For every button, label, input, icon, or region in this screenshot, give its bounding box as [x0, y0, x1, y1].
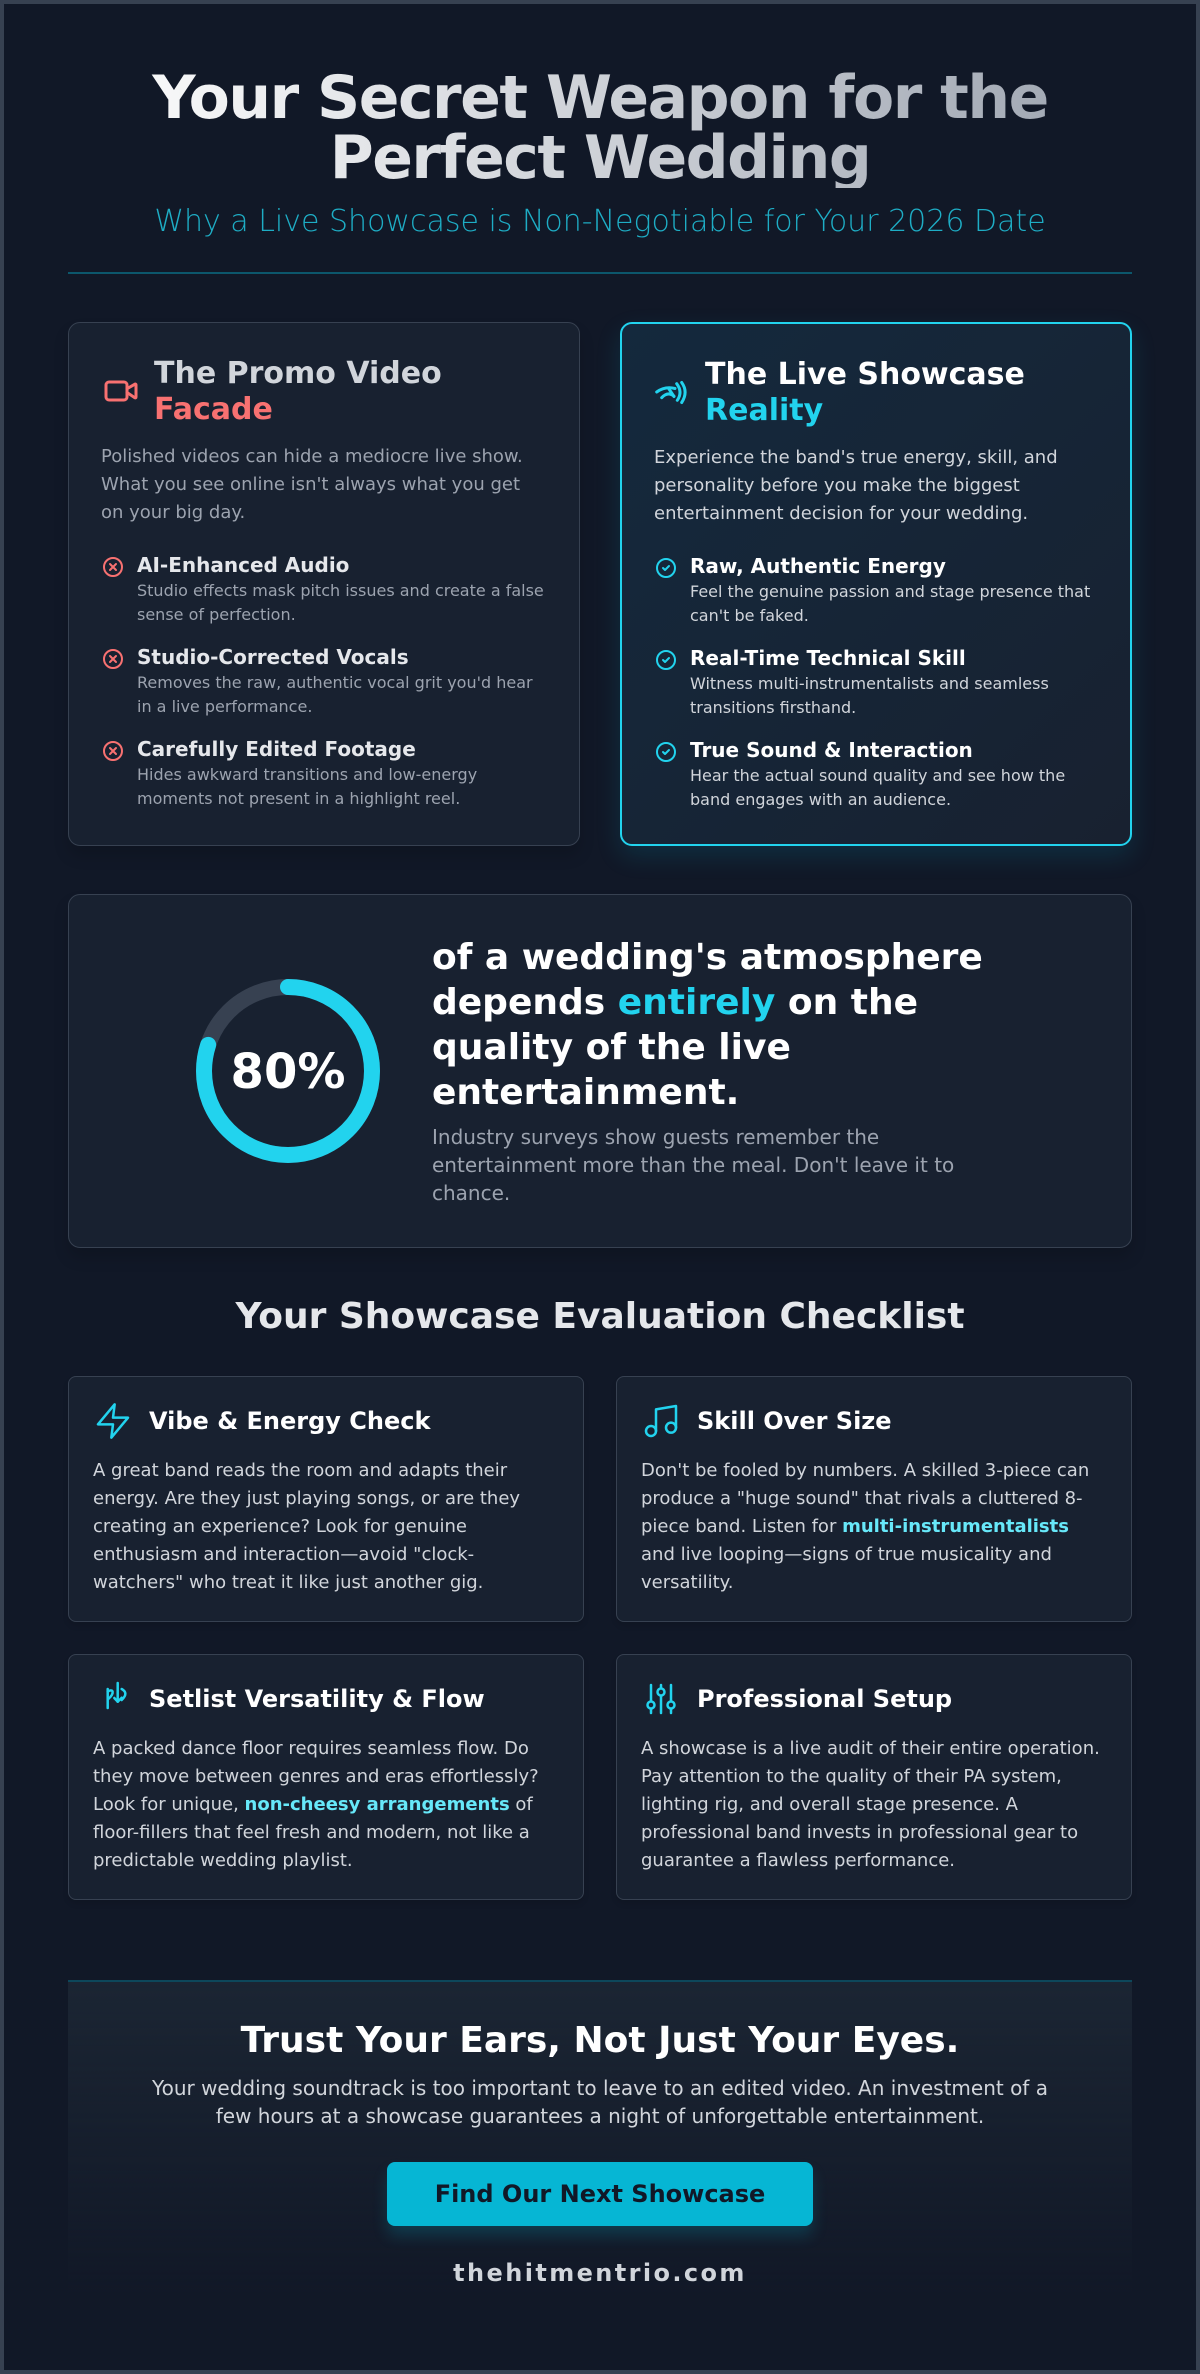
card text: A showcase is a live audit of their entire operation. — [641, 1738, 1100, 1759]
list item: raw authentic energy: Raw, Authentic Energy — [690, 554, 946, 578]
button: Find Our Next Showcase — [435, 2180, 765, 2208]
card text — [641, 1460, 1089, 1593]
panel description: Polished videos can hide a mediocre live show. — [101, 446, 523, 467]
list item: studio-corrected vocals: Studio-Corrected Vocals — [137, 645, 409, 669]
list item: real-time technical skill: Real-Time Technical Skill — [690, 646, 966, 670]
card text: energy. Are they just playing songs, or are they — [93, 1488, 520, 1509]
statistic statement: entertainment. — [432, 1072, 739, 1113]
list item: AI-enhanced audio: Studio effects mask pitch issues and create a false — [137, 581, 544, 600]
card heading: Vibe & Energy Check — [149, 1407, 430, 1435]
icon: x circle 3 — [103, 741, 123, 761]
statistic statement: quality of the live — [432, 1027, 791, 1068]
statistic statement: of a wedding's atmosphere — [432, 937, 983, 978]
icon: video camera — [104, 380, 138, 402]
statistic supporting text: entertainment more than the meal. Don't leave it to — [432, 1153, 954, 1177]
card heading: Skill Over Size — [697, 1407, 892, 1435]
list item: carefully edited footage: Carefully Edited Footage — [137, 737, 416, 761]
list item: raw authentic energy — [690, 554, 1090, 625]
card text: A packed dance floor requires seamless flow. Do — [93, 1738, 529, 1759]
list item: real-time technical skill: transitions firsthand. — [690, 698, 856, 717]
list item: studio-corrected vocals: in a live performance. — [137, 697, 312, 716]
card text: enthusiasm and interaction—avoid "clock- — [93, 1544, 474, 1565]
panel: professional setup — [616, 1654, 1132, 1900]
card text: creating an experience? Look for genuine — [93, 1516, 467, 1537]
list item: studio-corrected vocals: Removes the raw, authentic vocal grit you'd hear — [137, 673, 533, 692]
panel: skill over size — [616, 1376, 1132, 1622]
statistic supporting text: chance. — [432, 1181, 510, 1205]
card heading: Professional Setup — [697, 1685, 952, 1713]
list item: AI-enhanced audio: AI-Enhanced Audio — [137, 553, 349, 577]
list item: carefully edited footage — [137, 737, 477, 808]
panel: the live showcase reality — [620, 322, 1132, 846]
card text: floor-fillers that feel fresh and modern, not like a — [93, 1822, 530, 1843]
call to action section — [68, 1980, 1132, 2294]
panel: setlist versatility and flow — [68, 1654, 584, 1900]
header divider — [68, 272, 1132, 274]
icon: lightning bolt — [96, 1403, 130, 1439]
card text: professional band invests in professional gear to — [641, 1822, 1078, 1843]
card text: and live looping—signs of true musicality and — [641, 1544, 1052, 1565]
card text: watchers" who treat it like just another gig. — [93, 1572, 483, 1593]
panel description: What you see online isn't always what you get — [101, 474, 520, 495]
list item: true sound and interaction: band engages with an audience. — [690, 790, 951, 809]
panel description — [101, 446, 523, 523]
icon: sliders — [646, 1684, 676, 1714]
checklist heading: Your Showcase Evaluation Checklist — [235, 1296, 965, 1337]
panel description: Experience the band's true energy, skill, and — [654, 447, 1058, 468]
call to action text: Your wedding soundtrack is too important to leave to an edited video. An investment of a — [152, 2076, 1048, 2100]
list item: raw authentic energy: can't be faked. — [690, 606, 809, 625]
title — [68, 68, 1132, 188]
panel heading: The Live Showcase — [705, 357, 1025, 392]
icon: x circle 1 — [103, 557, 123, 577]
list item: AI-enhanced audio: sense of perfection. — [137, 605, 296, 624]
list item: studio-corrected vocals — [137, 645, 533, 716]
call to action text: few hours at a showcase guarantees a night of unforgettable entertainment. — [216, 2104, 984, 2128]
statistic supporting text — [432, 1125, 954, 1205]
panel heading: The Promo Video — [154, 356, 442, 391]
icon: music notes — [644, 1404, 678, 1438]
card text: guarantee a flawless performance. — [641, 1850, 955, 1871]
list item: real-time technical skill: Witness multi-instrumentalists and seamless — [690, 674, 1049, 693]
subtitle: Why a Live Showcase is Non-Negotiable for Your 2026 Date — [154, 204, 1046, 239]
card text: Don't be fooled by numbers. A skilled 3-piece can — [641, 1460, 1089, 1481]
icon: x circle 2 — [103, 649, 123, 669]
panel: vibe and energy check — [68, 1376, 584, 1622]
panel heading — [705, 357, 1025, 428]
panel: 80 percent statistic — [68, 894, 1132, 1248]
panel heading — [154, 356, 442, 427]
list item: true sound and interaction: True Sound & Interaction — [690, 738, 973, 762]
panel description: entertainment decision for your wedding. — [654, 503, 1028, 524]
list item: carefully edited footage: Hides awkward transitions and low-energy — [137, 765, 477, 784]
title: Your Secret Weapon for the — [152, 63, 1048, 133]
panel: the promo video facade — [68, 322, 580, 846]
donut chart: 80% — [196, 979, 380, 1163]
icon: check circle 2 — [656, 650, 676, 670]
card text: predictable wedding playlist. — [93, 1850, 353, 1871]
card text: Pay attention to the quality of their PA system, — [641, 1766, 1062, 1787]
call to action text — [152, 2076, 1048, 2128]
card text: Look for unique, non-cheesy arrangements of — [93, 1794, 533, 1815]
card text — [93, 1738, 539, 1871]
panel description: on your big day. — [101, 502, 245, 523]
icon: check circle 1 — [656, 558, 676, 578]
title: Perfect Wedding — [330, 123, 870, 193]
card text: piece band. Listen for multi-instrumentalists — [641, 1516, 1069, 1537]
panel heading: Facade — [154, 392, 273, 427]
website: thehitmentrio.com — [453, 2259, 747, 2287]
list item: raw authentic energy: Feel the genuine passion and stage presence that — [690, 582, 1090, 601]
card text: versatility. — [641, 1572, 733, 1593]
card text — [93, 1460, 520, 1593]
card text: lighting rig, and overall stage presence. A — [641, 1794, 1018, 1815]
list item: real-time technical skill — [690, 646, 1049, 717]
panel description — [654, 447, 1058, 524]
button — [387, 2162, 813, 2226]
card text — [641, 1738, 1100, 1871]
panel heading: Reality — [705, 393, 823, 428]
list item: carefully edited footage: moments not present in a highlight reel. — [137, 789, 460, 808]
statistic statement — [432, 937, 983, 1113]
list item: true sound and interaction: Hear the actual sound quality and see how the — [690, 766, 1065, 785]
panel description: personality before you make the biggest — [654, 475, 1020, 496]
card text: produce a "huge sound" that rivals a cluttered 8- — [641, 1488, 1083, 1509]
icon: setlist glyph — [106, 1682, 127, 1710]
list item: true sound and interaction — [690, 738, 1065, 809]
icon: check circle 3 — [656, 742, 676, 762]
card text: they move between genres and eras effortlessly? — [93, 1766, 539, 1787]
statistic statement: depends entirely on the — [432, 982, 918, 1023]
icon: live sound — [655, 380, 687, 404]
list item: AI-enhanced audio — [137, 553, 544, 624]
statistic supporting text: Industry surveys show guests remember the — [432, 1125, 879, 1149]
card text: A great band reads the room and adapts their — [93, 1460, 507, 1481]
card heading: Setlist Versatility & Flow — [149, 1685, 485, 1713]
call to action heading: Trust Your Ears, Not Just Your Eyes. — [241, 2020, 959, 2061]
donut chart: 80%: 80% — [231, 1044, 345, 1100]
